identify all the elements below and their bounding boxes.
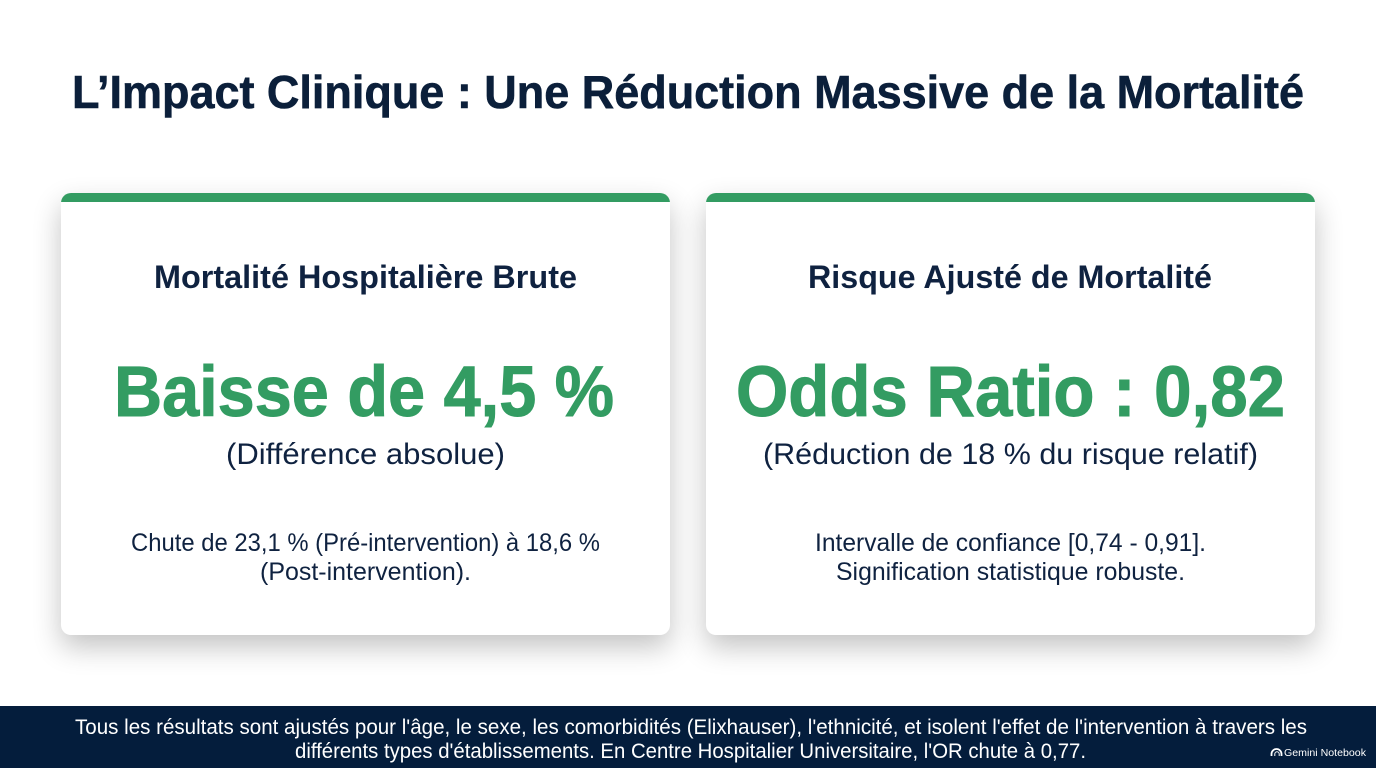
detail text: Intervalle de confiance [0,74 - 0,91]. <box>815 529 1206 557</box>
footer note <box>75 716 1307 763</box>
panel: left card background <box>61 193 670 635</box>
key figure: Odds Ratio : 0,82 <box>736 353 1285 432</box>
footer note: différents types d'établissements. En Centre Hospitalier Universitaire, l'OR chute à 0,77. <box>295 740 1086 763</box>
panel: right card background <box>706 193 1315 635</box>
figure caption: (Différence absolue) <box>226 438 505 471</box>
detail text <box>131 529 600 586</box>
figure caption: (Réduction de 18 % du risque relatif) <box>763 438 1258 471</box>
detail text: Signification statistique robuste. <box>836 558 1185 586</box>
detail text <box>815 529 1206 586</box>
icon: arches <box>1272 749 1282 756</box>
detail text: (Post-intervention). <box>260 558 471 586</box>
title: L’Impact Clinique : Une Réduction Massive de la Mortalité <box>72 66 1304 118</box>
card heading: Risque Ajusté de Mortalité <box>808 259 1212 295</box>
card heading: Mortalité Hospitalière Brute <box>154 259 577 295</box>
panel text: raw hospital mortality <box>114 259 614 586</box>
panel text: adjusted mortality risk <box>736 259 1285 586</box>
watermark: Gemini Notebook: Gemini Notebook <box>1284 747 1367 759</box>
footer band <box>0 706 1376 768</box>
key figure: Baisse de 4,5 % <box>114 353 614 432</box>
footer note: Tous les résultats sont ajustés pour l'âge, le sexe, les comorbidités (Elixhauser), l'ethnicité, et isolent l'effet de l'intervention à travers les <box>75 716 1307 739</box>
detail text: Chute de 23,1 % (Pré-intervention) à 18,6 % <box>131 529 600 557</box>
